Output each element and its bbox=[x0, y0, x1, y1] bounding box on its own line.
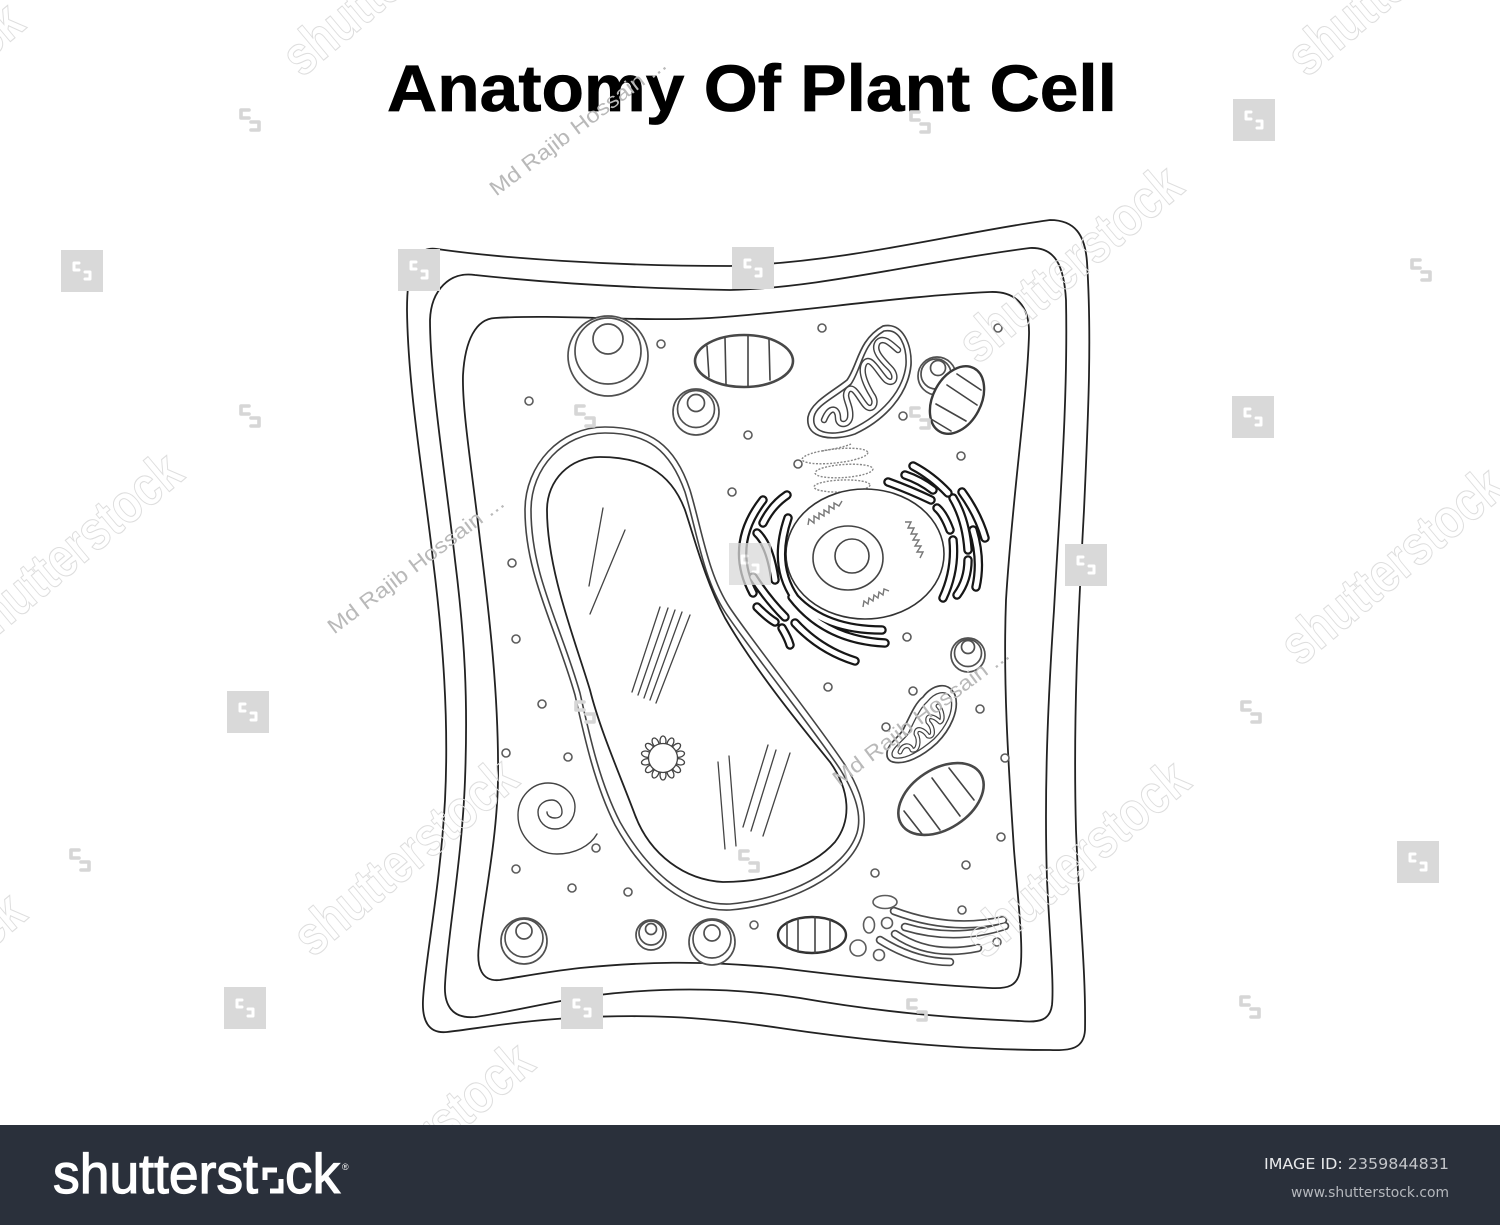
tonoplast outer bbox=[525, 427, 864, 910]
watermark: contributor name: Md Rajib Hossain ... bbox=[323, 491, 509, 639]
vesicle bottom left bbox=[501, 918, 547, 964]
vesicle right middle bbox=[951, 638, 985, 672]
vesicle top small bbox=[673, 389, 719, 435]
website url: www.shutterstock.com bbox=[1291, 1185, 1449, 1201]
tonoplast inner bbox=[531, 433, 859, 904]
plant cell diagram bbox=[407, 220, 1089, 1050]
watermark: contributor name: Md Rajib Hossain ... bbox=[828, 643, 1014, 791]
vesicle bottom middle bbox=[689, 919, 735, 965]
nucleus bbox=[786, 489, 944, 619]
watermark: contributor name: Md Rajib Hossain ... bbox=[485, 53, 671, 201]
plasma membrane bbox=[463, 292, 1029, 988]
image id: IMAGE ID: 2359844831 bbox=[1264, 1155, 1449, 1173]
chloroplast top bbox=[695, 335, 793, 387]
title: Anatomy Of Plant Cell bbox=[387, 51, 1117, 125]
dotted golgi above nucleus bbox=[801, 444, 873, 493]
chloroplast upper right bbox=[919, 357, 995, 443]
watermark: contributor name bbox=[323, 53, 1014, 791]
watermark: shutterstock repeated: shutterstock bbox=[945, 151, 1194, 375]
shutterstock logo: shutterst bbox=[53, 1142, 258, 1205]
watermark: shutterstock repeated: shutterstock bbox=[952, 746, 1201, 970]
vacuole crystal lines bbox=[589, 508, 790, 849]
shutterstock logo: ® bbox=[342, 1162, 349, 1172]
ribosome dots bbox=[502, 324, 1009, 946]
vacuole star crystal bbox=[641, 736, 685, 780]
vesicle bottom small bbox=[636, 920, 666, 950]
vesicle top large bbox=[568, 316, 648, 396]
nucleolus bbox=[813, 526, 883, 590]
spiral structure bbox=[518, 783, 597, 854]
vesicle upper right bbox=[918, 357, 956, 395]
cell wall outer line bbox=[407, 220, 1089, 1050]
mitochondrion top bbox=[808, 326, 911, 438]
chloroplast bottom bbox=[778, 917, 846, 953]
chromatin bbox=[808, 501, 923, 607]
endoplasmic reticulum bbox=[743, 466, 985, 661]
cell wall inner line bbox=[430, 248, 1066, 1022]
golgi apparatus bbox=[850, 896, 1005, 962]
chloroplast lower right bbox=[885, 748, 997, 850]
watermark: small outline logos bbox=[71, 110, 1430, 1020]
footer bar bbox=[0, 1125, 1500, 1225]
watermark: shutterstock repeated: shutterstock bbox=[280, 744, 529, 968]
central vacuole bbox=[547, 457, 846, 882]
mitochondrion lower bbox=[887, 686, 956, 763]
watermark: grey logo tiles bbox=[61, 99, 1439, 1029]
shutterstock logo: ck bbox=[285, 1142, 341, 1205]
